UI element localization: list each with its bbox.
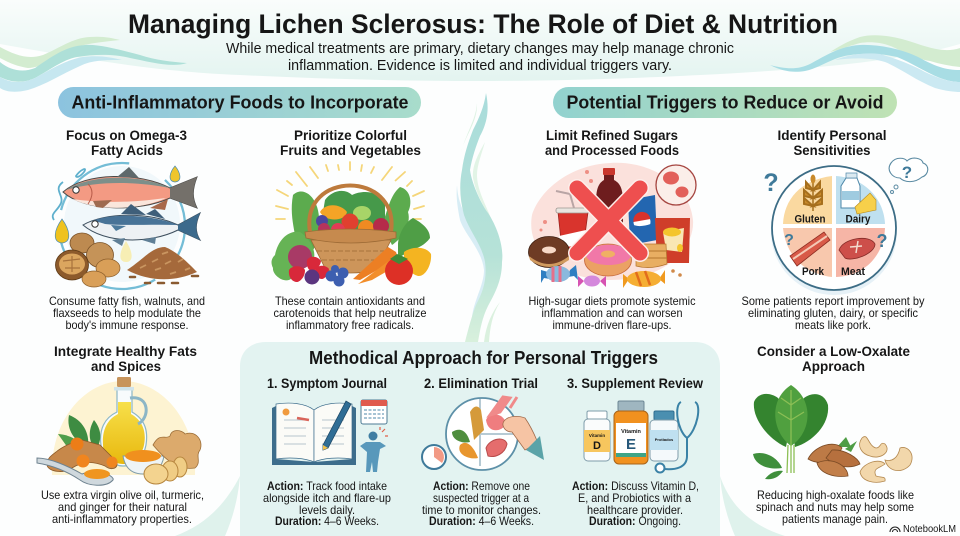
text: supplement review action: Duration: Ongoing. xyxy=(589,514,681,528)
plate labels: Pork xyxy=(802,266,825,278)
text: symptom journal action: Action: Track food intake xyxy=(267,479,387,493)
heading: fruits and vegetables: Prioritize Colorful xyxy=(294,127,407,143)
heading: low-oxalate: Consider a Low-Oxalate xyxy=(757,343,910,359)
heading: fruits and vegetables xyxy=(280,127,421,158)
text: symptom journal action xyxy=(263,479,391,528)
heading: fruits and vegetables: Fruits and Vegetables xyxy=(280,142,421,158)
step 3: supplement review: 3. Supplement Review xyxy=(567,375,703,391)
heading: personal sensitivities: Identify Personal xyxy=(778,127,886,143)
text: supplement review action: E, and Probiotics with a xyxy=(578,491,691,505)
icon: crossed-out processed foods xyxy=(528,163,696,288)
text: low-oxalate: patients manage pain. xyxy=(782,512,888,526)
heading: personal sensitivities xyxy=(778,127,886,158)
panel: omega-3 xyxy=(49,127,205,332)
text: low-oxalate: spinach and nuts may help some xyxy=(756,500,914,514)
icon: supplements and stethoscope: Protiados xyxy=(655,437,674,442)
plate labels: Gluten xyxy=(794,214,826,226)
icon: fish, walnuts and flaxseed xyxy=(53,163,200,289)
text: elimination trial action: time to monitor changes. xyxy=(422,503,541,517)
text: supplement review action: Action: Discuss Vitamin D, xyxy=(572,479,699,493)
icon: spinach, almonds and cashews xyxy=(753,385,912,482)
text: refined sugars xyxy=(528,294,696,332)
icon: food sensitivity plate xyxy=(763,158,928,295)
heading: healthy fats: and Spices xyxy=(91,358,161,374)
heading: refined sugars: and Processed Foods xyxy=(545,142,679,158)
panel: methodical approach xyxy=(240,342,720,536)
step 2: elimination trial xyxy=(422,375,544,528)
heading: methodical approach: Methodical Approach for Personal Triggers xyxy=(309,348,658,368)
text: symptom journal action: alongside itch and flare-up xyxy=(263,491,391,505)
heading: omega-3 xyxy=(66,127,187,158)
icon: journal, calendar and person xyxy=(272,400,388,472)
text: elimination trial action: Duration: 4–6 Weeks. xyxy=(429,514,534,528)
panel: colorful fruits and vegetables xyxy=(272,127,431,332)
icon: food sensitivity plate: ? xyxy=(784,232,794,249)
heading: healthy fats: Integrate Healthy Fats xyxy=(54,343,197,359)
text: symptom journal action: levels daily. xyxy=(299,503,355,517)
text: symptom journal action: Duration: 4–6 Weeks. xyxy=(275,514,379,528)
text: supplement review action xyxy=(572,479,699,528)
text: personal sensitivities xyxy=(742,294,924,332)
text: elimination trial action: Action: Remove one xyxy=(433,479,530,493)
step 1: symptom journal: 1. Symptom Journal xyxy=(267,375,387,391)
heading pill: anti-inflammatory foods xyxy=(58,87,421,118)
heading: low-oxalate xyxy=(757,343,910,374)
text: fruits and vegetables xyxy=(274,294,427,332)
text: healthy fats: and ginger for their natural xyxy=(58,500,187,514)
panel: low-oxalate approach xyxy=(753,343,914,526)
heading pill: potential triggers xyxy=(553,87,897,118)
text: refined sugars: immune-driven flare-ups. xyxy=(552,318,672,332)
panel: healthy fats and spices xyxy=(37,343,204,526)
text: personal sensitivities: Some patients report improvement by xyxy=(742,294,924,308)
heading: refined sugars xyxy=(545,127,679,158)
icon: supplements and stethoscope xyxy=(584,401,698,472)
heading: omega-3: Focus on Omega-3 xyxy=(66,127,187,143)
text: elimination trial action: suspected trigger at a xyxy=(433,491,529,505)
text: healthy fats: Use extra virgin olive oil, turmeric, xyxy=(41,488,204,502)
subtitle: While medical treatments are primary, dietary changes may help manage chronic xyxy=(226,41,734,57)
step 1: symptom journal xyxy=(263,375,391,528)
heading pill: anti-inflammatory foods: Anti-Inflammatory Foods to Incorporate xyxy=(72,92,408,112)
icon: food sensitivity plate: ? xyxy=(763,169,779,197)
icon: supplements and stethoscope: Vitamin xyxy=(589,433,605,438)
heading: omega-3: Fatty Acids xyxy=(91,142,163,158)
text: fruits and vegetables: These contain antioxidants and xyxy=(275,294,425,308)
heading: low-oxalate: Approach xyxy=(802,358,865,374)
text: healthy fats: anti-inflammatory properties. xyxy=(52,512,192,526)
plate labels: Dairy xyxy=(846,214,871,226)
text: omega-3 xyxy=(49,294,205,332)
subtitle: inflammation. Evidence is limited and individual triggers vary. xyxy=(288,58,672,74)
step 2: elimination trial: 2. Elimination Trial xyxy=(424,375,538,391)
icon: supplements and stethoscope: Vitamin xyxy=(621,429,642,435)
icon: basket of produce xyxy=(272,162,431,286)
heading pill: potential triggers: Potential Triggers to Reduce or Avoid xyxy=(566,92,884,112)
text: personal sensitivities: meats like pork. xyxy=(795,318,871,332)
icon: supplements and stethoscope: E xyxy=(626,436,636,453)
icon: olive oil, turmeric and ginger xyxy=(37,377,201,485)
text: healthy fats xyxy=(41,488,204,526)
heading: refined sugars: Limit Refined Sugars xyxy=(546,127,678,143)
text: personal sensitivities: eliminating gluten, dairy, or specific xyxy=(748,306,918,320)
plate labels: Meat xyxy=(841,266,865,278)
icon: food sensitivity plate: ? xyxy=(902,163,912,182)
text: omega-3: Consume fatty fish, walnuts, and xyxy=(49,294,205,308)
central flowing ribbon decoration xyxy=(461,103,477,153)
NotebookLM watermark: NotebookLM xyxy=(903,524,956,535)
icon: plate, clock and hand xyxy=(422,397,544,470)
text: fruits and vegetables: inflammatory free radicals. xyxy=(286,318,414,332)
panel: refined sugars xyxy=(528,127,696,332)
heading: personal sensitivities: Sensitivities xyxy=(794,142,871,158)
text: refined sugars: inflammation and can worsen xyxy=(542,306,682,320)
text: refined sugars: High-sugar diets promote systemic xyxy=(528,294,696,308)
icon: supplements and stethoscope: D xyxy=(593,440,601,452)
text: omega-3: body's immune response. xyxy=(66,318,188,332)
heading: healthy fats xyxy=(54,343,197,374)
plate labels xyxy=(794,214,871,278)
text: supplement review action: healthcare provider. xyxy=(587,503,683,517)
title: Managing Lichen Sclerosus: The Role of Diet & Nutrition xyxy=(128,9,838,39)
text: elimination trial action xyxy=(422,479,541,528)
text: fruits and vegetables: carotenoids that help neutralize xyxy=(274,306,427,320)
panel: personal sensitivities xyxy=(742,127,928,332)
icon: food sensitivity plate: ? xyxy=(876,231,888,251)
subtitle xyxy=(226,41,734,74)
text: omega-3: flaxseeds to help modulate the xyxy=(53,306,201,320)
red X xyxy=(577,188,640,253)
step 3: supplement review xyxy=(567,375,703,528)
text: low-oxalate xyxy=(756,488,914,526)
text: low-oxalate: Reducing high-oxalate foods like xyxy=(757,488,914,502)
